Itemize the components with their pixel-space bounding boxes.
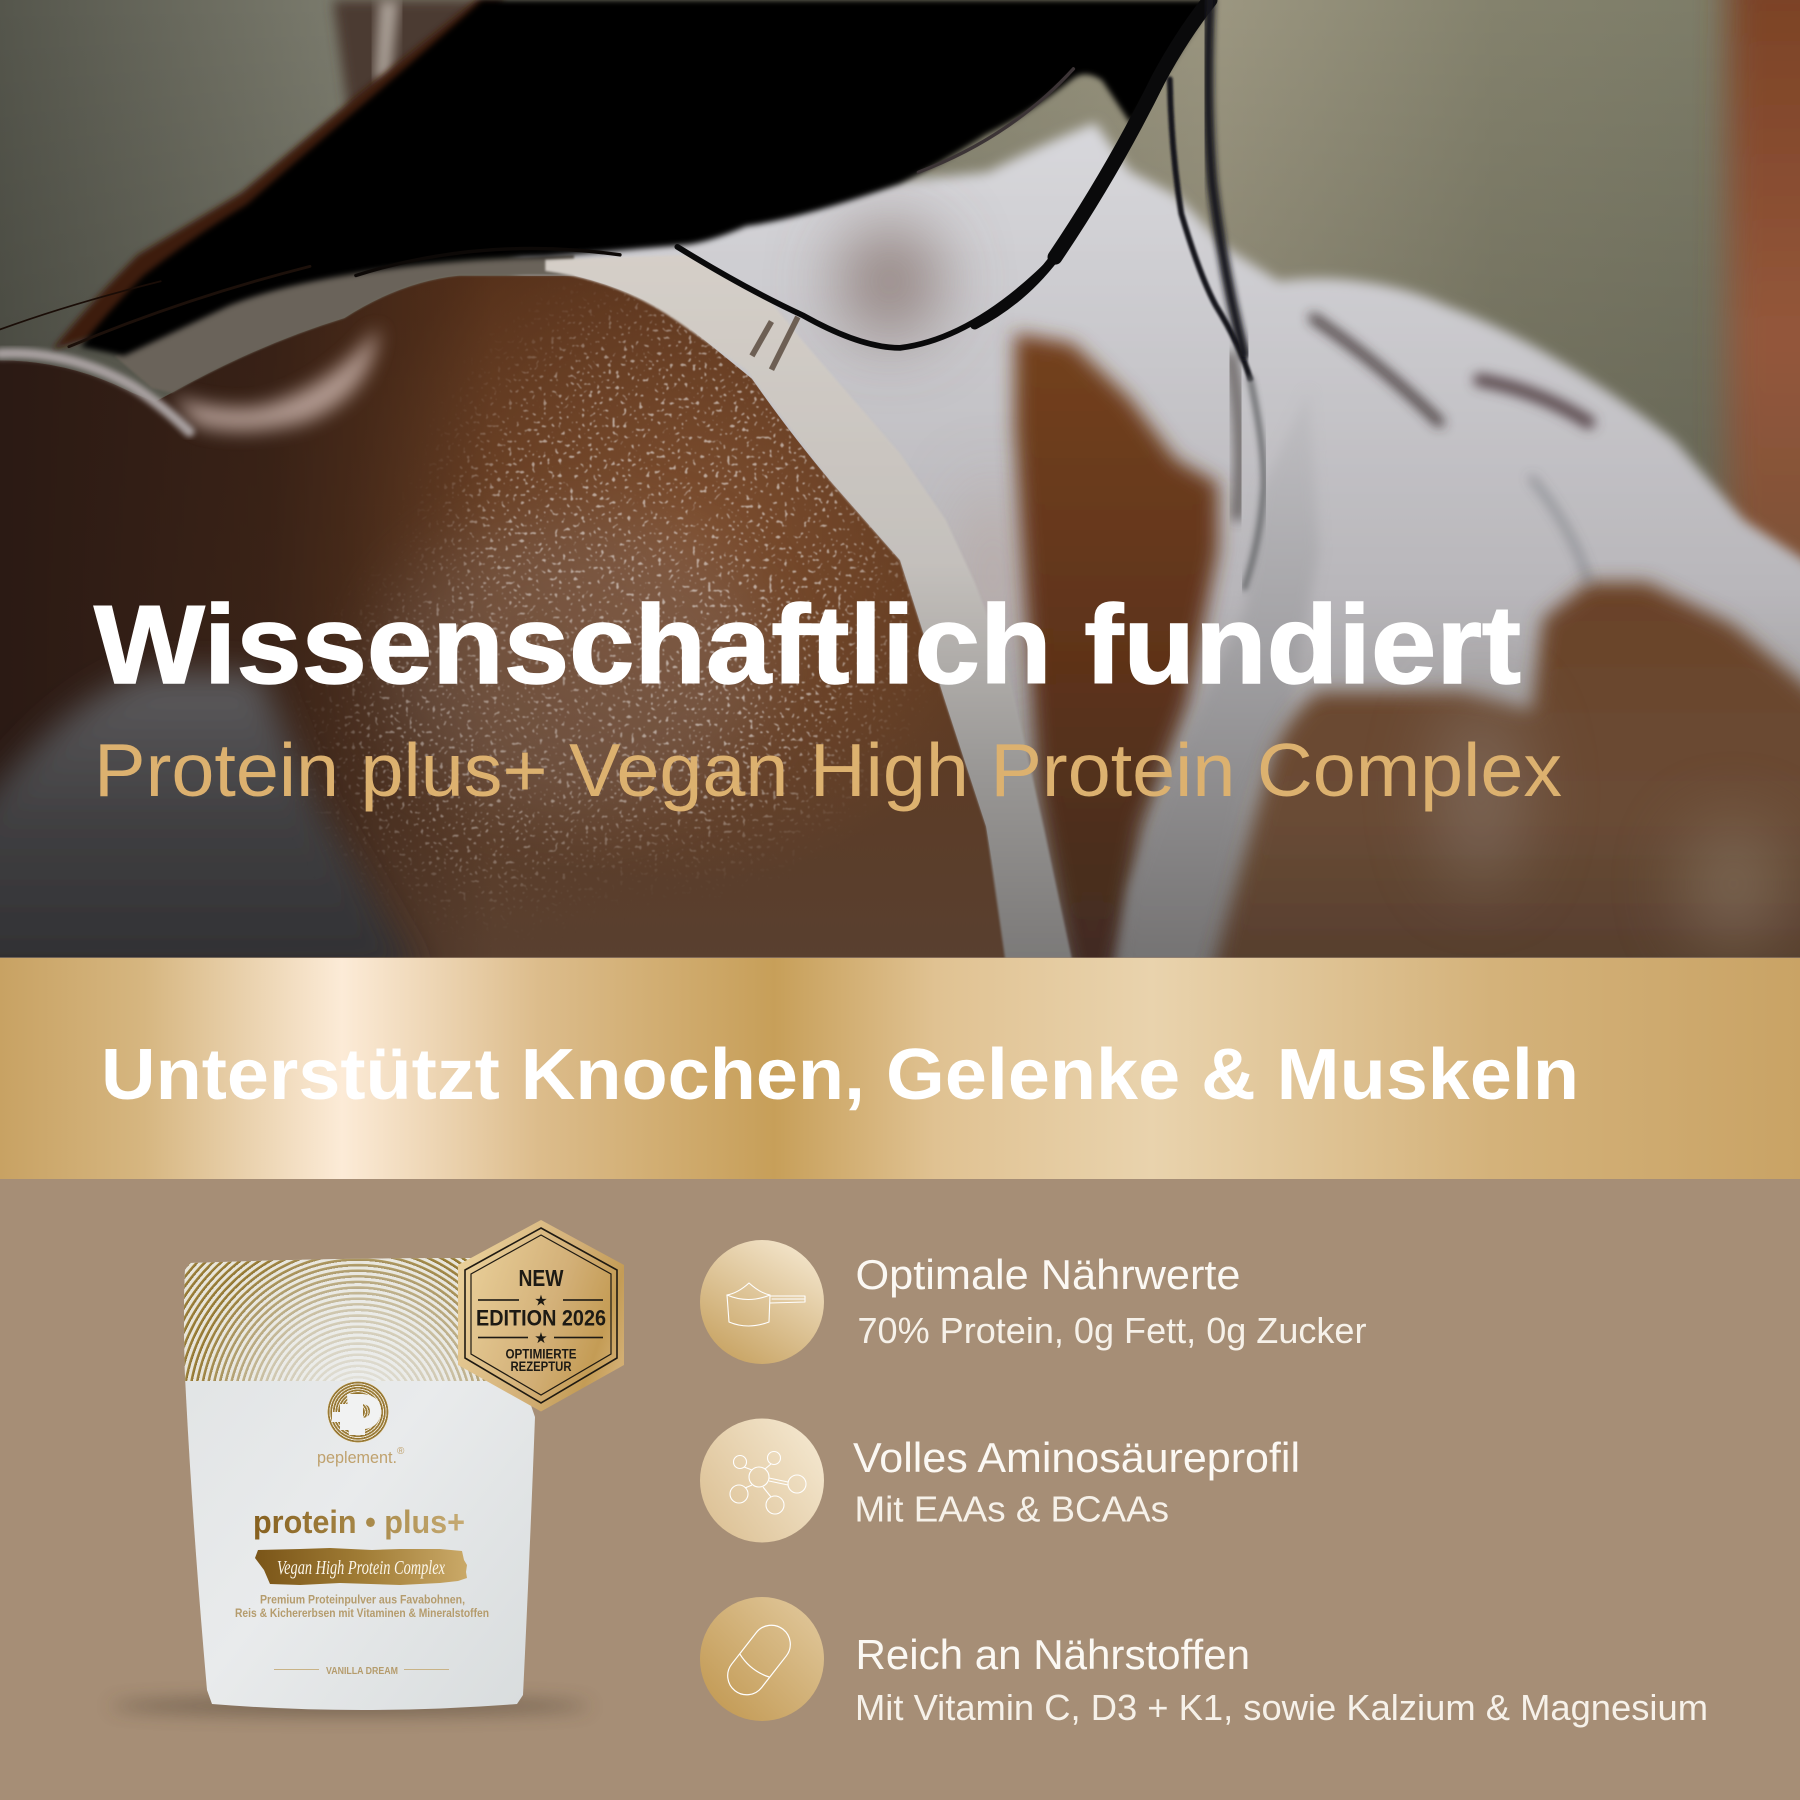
feature title: Volles Aminosäureprofil xyxy=(853,1434,1300,1481)
badge text: REZEPTUR xyxy=(510,1359,572,1374)
feature detail: 70% Protein, 0g Fett, 0g Zucker xyxy=(858,1310,1366,1351)
brush stroke label xyxy=(255,1548,467,1585)
dark left side xyxy=(0,264,494,964)
feature detail: Mit Vitamin C, D3 + K1, sowie Kalzium & Magnesium xyxy=(855,1687,1708,1728)
lit back and shoulder xyxy=(517,123,1800,987)
product bag xyxy=(110,1250,590,1714)
backdrop xyxy=(0,0,1745,514)
feature title: Reich an Nährstoffen xyxy=(856,1631,1250,1678)
badge: new edition 2026 xyxy=(458,1220,624,1412)
shoulder skin xyxy=(0,276,1006,958)
feature title: Optimale Nährwerte xyxy=(856,1251,1240,1298)
flavour label: VANILLA DREAM xyxy=(326,1666,398,1677)
bag description: Reis & Kichererbsen mit Vitaminen & Mineralstoffen xyxy=(235,1606,489,1620)
gold ring pattern xyxy=(170,1250,550,1381)
hair mass xyxy=(80,0,1212,356)
skin base tone xyxy=(0,264,1033,964)
brush stroke label: Vegan High Protein Complex xyxy=(277,1557,445,1579)
icon: capsule xyxy=(720,1618,798,1702)
rim light on left shoulder xyxy=(0,353,189,432)
bag description: Premium Proteinpulver aus Favabohnen, xyxy=(260,1592,465,1606)
brand name: peplement. xyxy=(317,1448,397,1467)
hair strands xyxy=(0,0,1264,588)
hair fringe edge xyxy=(53,0,505,349)
feature detail: Mit EAAs & BCAAs xyxy=(854,1489,1169,1530)
dim collar xyxy=(115,255,574,393)
subheading: product name: Protein plus+ Vegan High Protein Complex xyxy=(94,728,1562,812)
badge hexagon xyxy=(458,1220,624,1412)
badge text: ★ xyxy=(534,1329,548,1347)
brand logo xyxy=(327,1381,389,1443)
bag shadow xyxy=(110,1698,590,1714)
badge text xyxy=(476,1265,606,1374)
hero photo: sweaty back of athlete xyxy=(0,0,1800,999)
badge text: EDITION 2026 xyxy=(476,1306,606,1331)
icon circle xyxy=(700,1418,824,1542)
skin glow xyxy=(230,172,1056,976)
icon: molecule xyxy=(730,1452,806,1514)
badge outlines xyxy=(465,1228,617,1403)
icon circle xyxy=(700,1597,824,1721)
feature: micronutrients xyxy=(700,1597,1708,1728)
registered mark: ® xyxy=(397,1446,405,1457)
badge rules xyxy=(478,1299,603,1338)
shoulder highlight xyxy=(172,327,379,431)
shoulder shadow creases xyxy=(1313,318,1589,582)
band heading: Unterstützt Knochen, Gelenke & Muskeln xyxy=(101,1035,1579,1115)
right strap xyxy=(1113,426,1318,958)
product title: protein • plus+ xyxy=(253,1504,465,1540)
gold band xyxy=(0,958,1800,1179)
strap buckle xyxy=(752,317,798,370)
badge text: NEW xyxy=(518,1265,564,1291)
badge text: ★ xyxy=(534,1292,548,1310)
water droplets texture xyxy=(172,276,1033,987)
heading: Wissenschaftlich fundiert: Wissenschaftlich fundiert xyxy=(94,583,1521,707)
bag body xyxy=(184,1258,535,1710)
bag description xyxy=(235,1592,489,1620)
feature: nutrition xyxy=(700,1240,1366,1364)
icon: scoop xyxy=(727,1283,805,1326)
feature: amino acids xyxy=(700,1418,1300,1542)
mottled skin near strap xyxy=(838,224,1014,666)
collar strap xyxy=(545,255,1078,987)
water haze xyxy=(379,517,769,815)
lower right brown skin xyxy=(1204,582,1800,999)
icon circle xyxy=(700,1240,824,1364)
grey lower left xyxy=(0,672,419,976)
neck behind hair xyxy=(333,0,488,109)
central brown skin patch xyxy=(1015,333,1218,987)
badge text: OPTIMIERTE xyxy=(506,1347,576,1362)
arm at right edge xyxy=(1728,0,1800,585)
